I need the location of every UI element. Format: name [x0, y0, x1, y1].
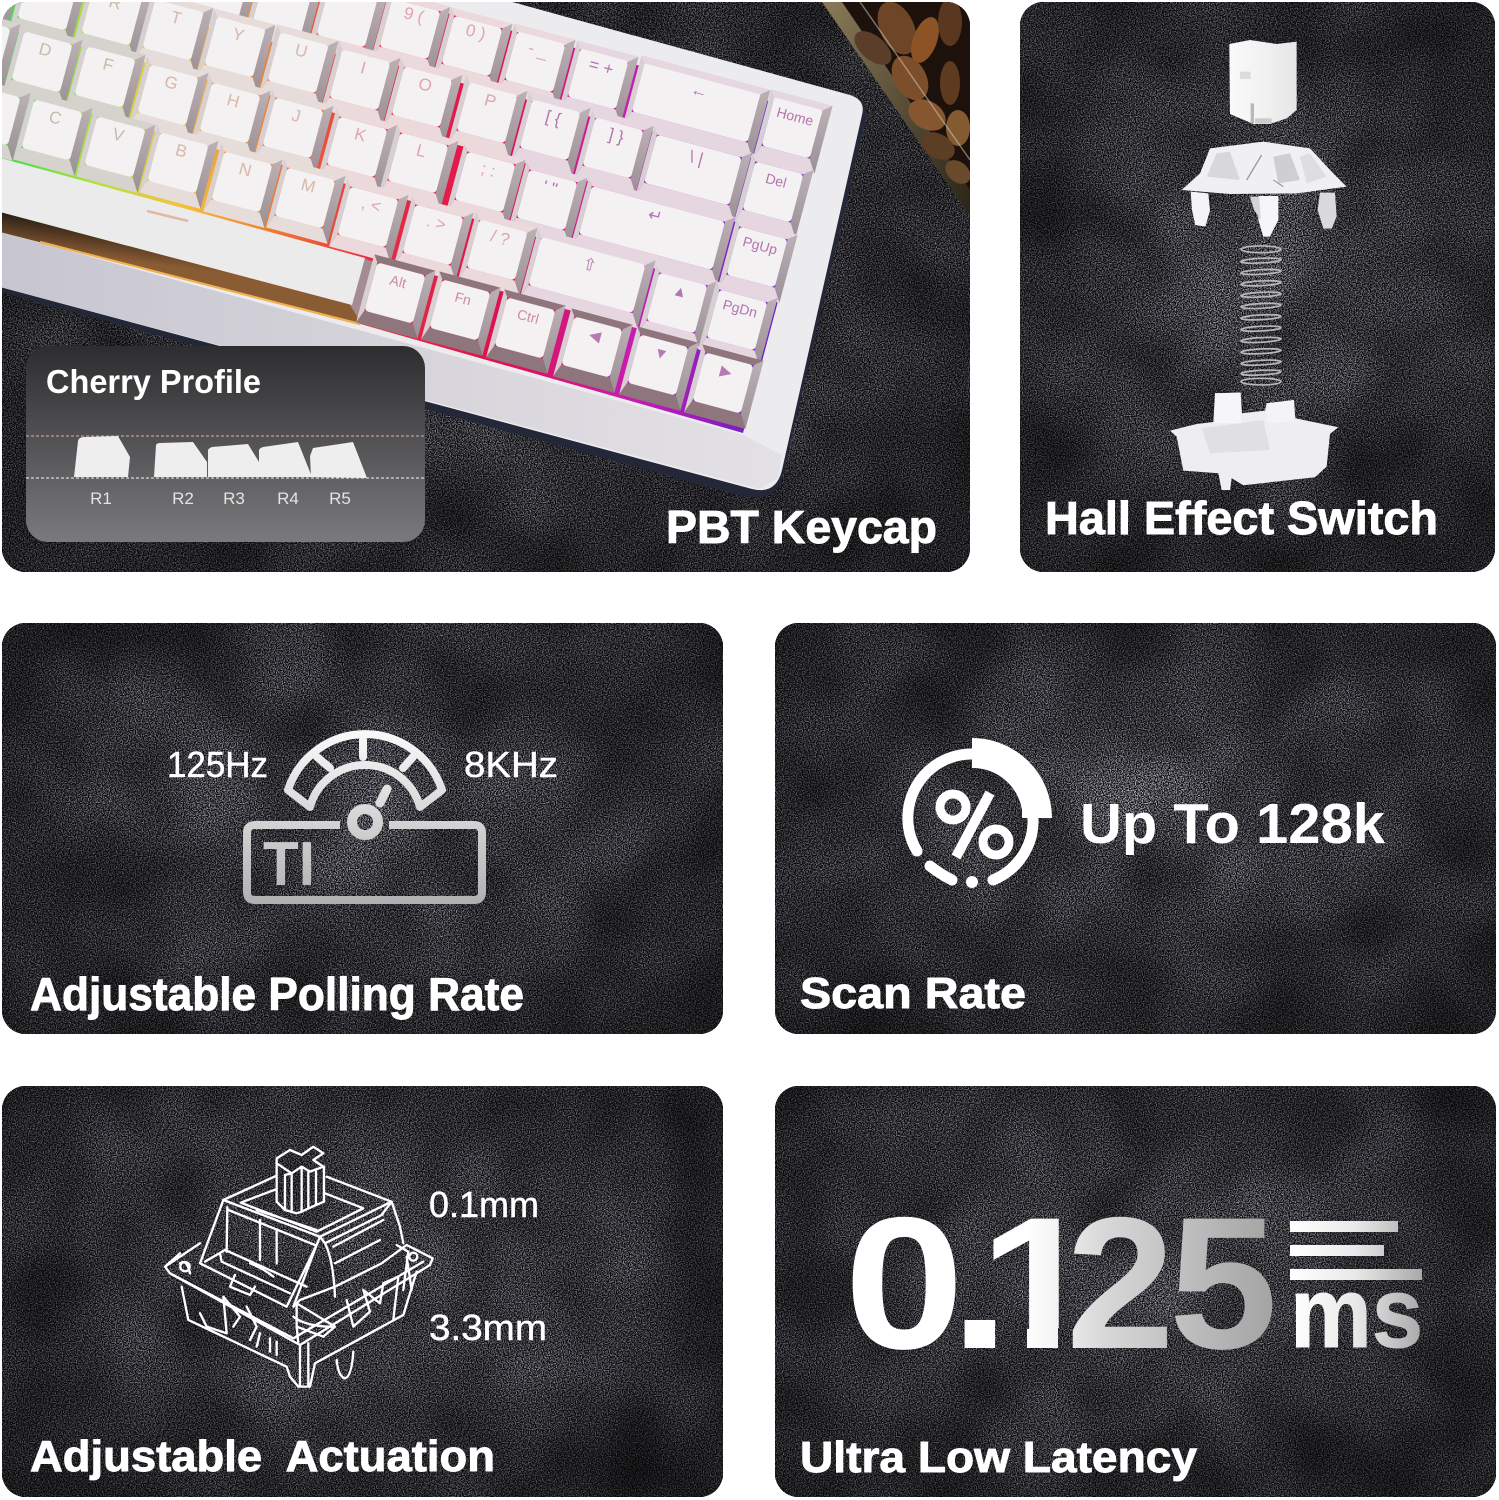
- scan rate value: Up To 128k: [1080, 792, 1385, 856]
- row labels: [90, 489, 351, 508]
- cherry profile card: [26, 346, 425, 542]
- keycap profile silhouettes: [74, 436, 367, 478]
- icon: polling gauge: [247, 734, 482, 900]
- exploded switch illustration: [1170, 40, 1347, 490]
- panel: scan rate: [775, 623, 1496, 1034]
- keyboard frame: [0, 0, 867, 498]
- panel: PBT keycap photo: [0, 0, 975, 572]
- keycaps row 1: [ {: [543, 107, 563, 129]
- panel title: Ultra Low Latency: [800, 1433, 1198, 1482]
- keycaps row 2: H: [225, 90, 242, 112]
- keycaps row 2: PgUp: [741, 233, 779, 258]
- keycaps row 1: U: [293, 40, 310, 62]
- keycaps row 3: [0, 76, 778, 366]
- icon text: TI: TI: [263, 830, 315, 899]
- panel title: PBT Keycap: [666, 501, 937, 553]
- row labels: R3: [223, 489, 245, 508]
- LED plate: [0, 0, 827, 433]
- keycaps row 0: 0 ): [464, 20, 488, 44]
- keycaps row 3: N: [237, 159, 254, 181]
- keycaps row 2: ; :: [479, 159, 498, 181]
- latency number: 0.: [844, 1178, 1010, 1388]
- keycaps row 3: , <: [359, 193, 383, 217]
- row labels: R4: [277, 489, 299, 508]
- icon: percent dial: [908, 738, 1052, 888]
- keycaps row 2: G: [162, 72, 180, 94]
- icon: switch line art: [165, 1147, 433, 1387]
- card heading: Cherry Profile: [46, 363, 261, 400]
- keycaps row 3: ▲: [671, 282, 689, 302]
- keycaps row 1: I: [358, 58, 368, 78]
- row labels: R5: [329, 489, 351, 508]
- panel: adjustable polling rate: [2, 623, 723, 1034]
- keycaps row 2: K: [352, 124, 369, 146]
- panel title: Adjustable Actuation: [30, 1432, 495, 1481]
- panel title: Scan Rate: [800, 969, 1026, 1018]
- keycaps row 4: Fn: [453, 289, 473, 308]
- keycaps row 2: F: [101, 54, 116, 75]
- latency number: 1: [979, 1178, 1099, 1388]
- panel: adjustable actuation: [2, 1086, 723, 1497]
- keycaps row 0: ←: [689, 80, 710, 102]
- keycaps row 1: Del: [764, 170, 788, 191]
- keycaps row 0: [0, 0, 833, 174]
- keycaps row 2: D: [37, 39, 54, 61]
- keycaps row 3: / ?: [489, 226, 512, 250]
- keycaps row 0: Home: [775, 104, 815, 129]
- spring: [1241, 246, 1281, 385]
- keycaps row 3: ⇧: [580, 254, 599, 276]
- under-bar gold glow: [0, 212, 360, 325]
- keycaps row 3: C: [47, 107, 64, 129]
- unit label: ms: [1290, 1257, 1423, 1369]
- high value label: 8KHz: [464, 744, 558, 785]
- keycaps row 4: ◀: [587, 326, 603, 346]
- keycaps row 1: [9, 0, 814, 238]
- keycaps row 1: \ |: [687, 147, 705, 169]
- unit fraction bars: [1290, 1221, 1422, 1280]
- keycaps row 0: = +: [587, 55, 616, 79]
- keycaps row 1: Y: [230, 24, 246, 46]
- keycaps row 1: ] }: [606, 125, 626, 147]
- keycaps row 0: 9 (: [402, 3, 426, 27]
- bottom housing: [1170, 393, 1338, 490]
- panel: ultra low latency: [775, 1086, 1496, 1497]
- keycaps row 4: Ctrl: [516, 306, 541, 327]
- keycaps row 2: ' ": [541, 177, 559, 199]
- keycaps row 2: ↵: [646, 205, 665, 227]
- keycaps row 4: ▶: [718, 362, 734, 382]
- keycaps row 2: [0, 7, 798, 303]
- keycaps row 3: V: [110, 124, 127, 146]
- keycaps row 3: PgDn: [721, 296, 759, 321]
- keycaps row 1: O: [416, 74, 434, 96]
- latency number: 25: [1066, 1177, 1278, 1388]
- keycaps row 3: M: [299, 175, 318, 197]
- keycaps row 2: J: [290, 106, 303, 126]
- row labels: R2: [172, 489, 194, 508]
- low value label: 125Hz: [167, 744, 268, 785]
- keycaps row 4: Alt: [388, 272, 408, 291]
- row labels: R1: [90, 489, 112, 508]
- keycaps row 4: ▼: [652, 344, 670, 364]
- actuation lower value: 3.3mm: [429, 1307, 547, 1348]
- coffee bean block: [822, 0, 975, 216]
- keycaps row 3: B: [173, 140, 189, 162]
- keycaps row 3: . >: [424, 211, 448, 235]
- keycaps row 1: P: [482, 90, 498, 112]
- latency number: [852, 1216, 1272, 1350]
- keycaps row 4: [356, 254, 764, 429]
- actuation upper value: 0.1mm: [429, 1184, 539, 1225]
- keycaps row 2: L: [414, 141, 428, 161]
- panel title: Adjustable Polling Rate: [30, 968, 524, 1020]
- panel: Hall effect switch: [1020, 2, 1495, 572]
- keycaps row 0: - _: [526, 38, 551, 62]
- panel title: Hall Effect Switch: [1045, 492, 1438, 544]
- space bar: [0, 158, 374, 324]
- keyboard photo: [0, 0, 975, 497]
- keycaps row 1: T: [169, 7, 184, 28]
- top housing: [1182, 142, 1347, 237]
- stem: [1229, 40, 1297, 124]
